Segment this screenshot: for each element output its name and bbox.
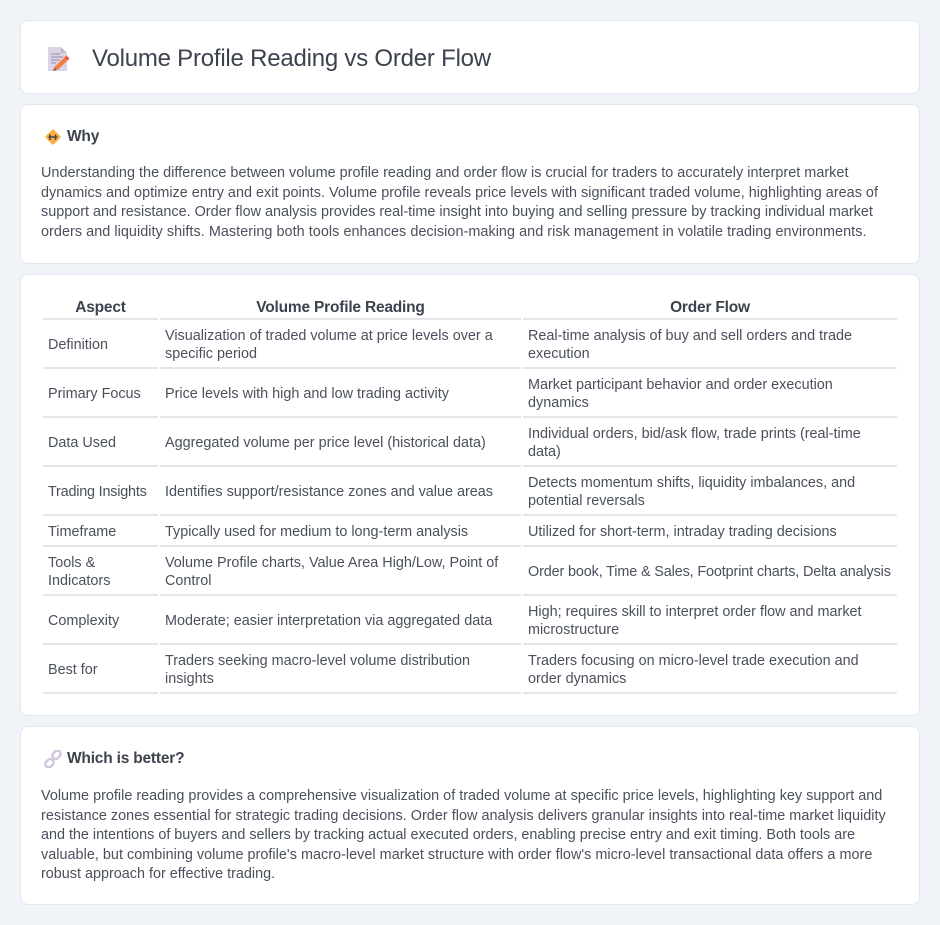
icon: memo with pencil	[48, 47, 70, 71]
comparison table: Traders seeking macro-level volume distribution	[165, 653, 470, 669]
text: which is better paragraph: valuable, but combining volume profile's macro-level market structure with order flow's micro-level transactional data offers a more	[41, 847, 872, 863]
text: why paragraph: orders and liquidity shifts. Mastering both tools enhances decision-making and risk management in volatile trading environments.	[41, 224, 866, 240]
comparison table: Indicators	[48, 573, 110, 589]
comparison table: Best for	[48, 662, 98, 678]
comparison table: Data Used	[48, 435, 116, 451]
comparison table: Primary Focus	[48, 386, 141, 402]
text: why paragraph: dynamics and optimize entry and exit points. Volume profile reveals price levels with significant traded volume, highlighting areas of	[41, 185, 878, 201]
comparison table: Individual orders, bid/ask flow, trade prints (real-time	[528, 426, 861, 442]
text: which is better paragraph: robust approach for effective trading.	[41, 866, 275, 882]
comparison table: order dynamics	[528, 671, 626, 687]
comparison table: Detects momentum shifts, liquidity imbalances, and	[528, 475, 855, 491]
comparison table: Tools &	[48, 555, 95, 571]
comparison table: specific period	[165, 346, 257, 362]
comparison table: Utilized for short-term, intraday trading decisions	[528, 524, 837, 540]
panel: header	[20, 20, 920, 94]
comparison table: Identifies support/resistance zones and value areas	[165, 484, 493, 500]
comparison table: Order book, Time & Sales, Footprint charts, Delta analysis	[528, 564, 891, 580]
text: why paragraph: support and resistance. Order flow analysis provides real-time insight into buying and selling pressure by tracking individual market	[41, 204, 873, 220]
panel: which is better	[20, 726, 920, 905]
comparison table: Visualization of traded volume at price levels over a	[165, 328, 493, 344]
icon: construction diamond	[45, 129, 61, 145]
heading: why: Why	[67, 128, 99, 145]
comparison table: Market participant behavior and order execution	[528, 377, 833, 393]
panel: why	[20, 104, 920, 264]
comparison table: insights	[165, 671, 214, 687]
text: which is better paragraph: and the intentions of buyers and sellers by tracking actual executed orders, enabling precise entry and exit timing. Both tools are	[41, 827, 855, 843]
comparison table: Traders focusing on micro-level trade execution and	[528, 653, 859, 669]
comparison table: microstructure	[528, 622, 619, 638]
comparison table: data)	[528, 444, 561, 460]
comparison table: Complexity	[48, 613, 119, 629]
comparison table: Real-time analysis of buy and sell orders and trade	[528, 328, 852, 344]
comparison table: Control	[165, 573, 211, 589]
comparison table: Aspect	[75, 299, 126, 316]
comparison table	[43, 299, 897, 694]
comparison table: Volume Profile charts, Value Area High/Low, Point of	[165, 555, 498, 571]
comparison table: Moderate; easier interpretation via aggregated data	[165, 613, 492, 629]
comparison table: dynamics	[528, 395, 589, 411]
text: which is better paragraph: Volume profile reading provides a comprehensive visualization of traded volume at specific price levels, highlighting key support and	[41, 788, 882, 804]
comparison table: Trading Insights	[48, 484, 147, 500]
text: which is better paragraph	[41, 788, 886, 882]
heading: which is better: Which is better?	[67, 750, 184, 767]
comparison table: Aggregated volume per price level (historical data)	[165, 435, 486, 451]
comparison table: potential reversals	[528, 493, 645, 509]
text: why paragraph	[41, 165, 878, 240]
text: which is better paragraph: resistance zones essential for strategic trading decisions. Order flow analysis delivers granular insights into real-time market liquidity	[41, 808, 886, 824]
text: why paragraph: Understanding the difference between volume profile reading and order flow is crucial for traders to accurately interpret market	[41, 165, 848, 181]
title: Volume Profile Reading vs Order Flow	[92, 45, 491, 72]
comparison table: Order Flow	[670, 299, 750, 316]
comparison table: Price levels with high and low trading activity	[165, 386, 449, 402]
comparison table: High; requires skill to interpret order flow and market	[528, 604, 862, 620]
comparison table: Volume Profile Reading	[256, 299, 425, 316]
icon: link	[44, 750, 62, 768]
comparison table: Definition	[48, 337, 108, 353]
comparison table: execution	[528, 346, 590, 362]
comparison table: Typically used for medium to long-term analysis	[165, 524, 468, 540]
panel: comparison table	[20, 274, 920, 716]
comparison table: Timeframe	[48, 524, 116, 540]
